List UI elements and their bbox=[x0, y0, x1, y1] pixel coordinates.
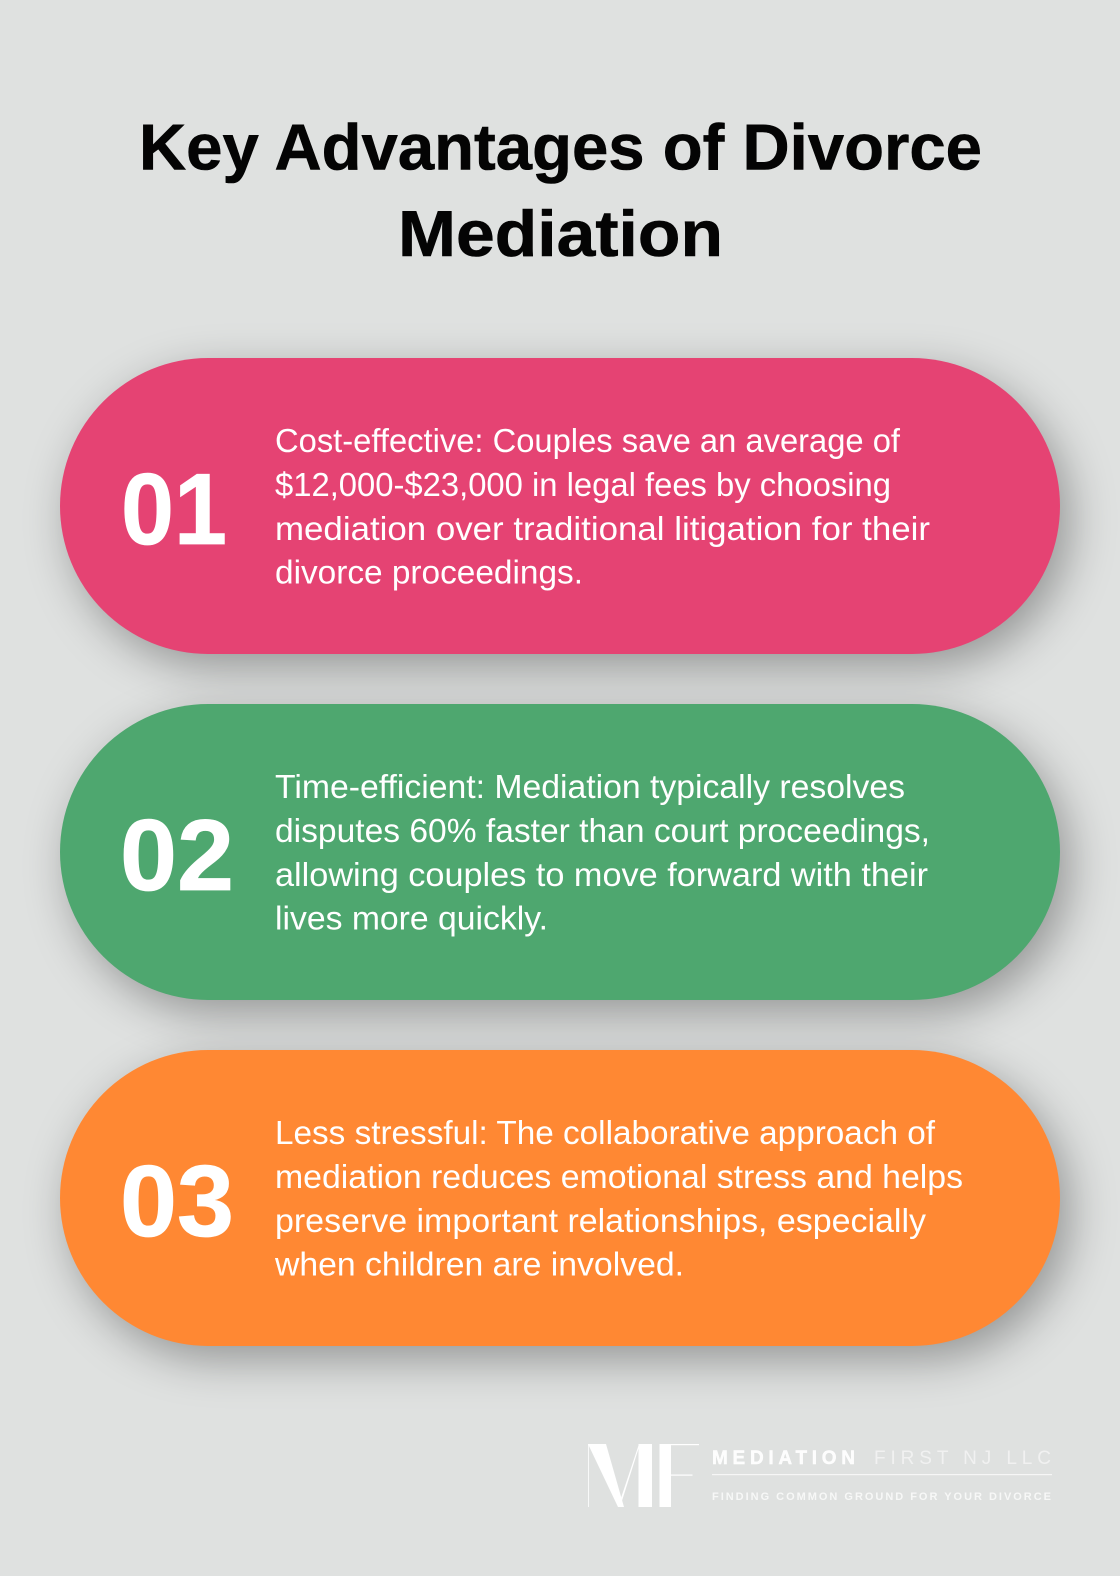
text block: less stressful bbox=[274, 1114, 963, 1282]
company name bbox=[712, 1448, 1051, 1469]
text block: cost-effective: divorce proceedings. bbox=[275, 554, 583, 590]
icon: MF monogram bbox=[588, 1444, 699, 1507]
number 01: 01 bbox=[121, 454, 227, 566]
pill background: green bbox=[60, 704, 1060, 1000]
title: Mediation bbox=[398, 197, 723, 270]
text block: cost-effective: mediation over traditional litigation for their bbox=[275, 510, 930, 547]
number 02: 02 bbox=[120, 800, 234, 912]
text block: time-efficient: Time-efficient: Mediation typically resolves bbox=[275, 768, 905, 805]
company name: MEDIATION bbox=[712, 1448, 855, 1469]
text block: time-efficient: allowing couples to move forward with their bbox=[275, 856, 928, 893]
tagline: FINDING COMMON GROUND FOR YOUR DIVORCE bbox=[712, 1491, 1051, 1503]
number 03: 03 bbox=[120, 1146, 234, 1258]
title: Key Advantages of Divorce bbox=[139, 110, 982, 184]
text block: time-efficient: disputes 60% faster than court proceedings, bbox=[275, 812, 930, 849]
pill background: orange bbox=[60, 1050, 1060, 1346]
company name: FIRST NJ LLC bbox=[874, 1448, 1051, 1469]
logo: Mediation First NJ LLC bbox=[588, 1444, 1052, 1507]
text block: time-efficient bbox=[275, 768, 930, 936]
text block: less stressful: Less stressful: The collaborative approach of bbox=[275, 1114, 936, 1151]
panel: cost-effective bbox=[60, 358, 1060, 654]
text block: cost-effective bbox=[275, 422, 930, 590]
pill background: pink bbox=[60, 358, 1060, 654]
text block: time-efficient: lives more quickly. bbox=[275, 900, 548, 936]
title bbox=[139, 110, 982, 270]
panel: less stressful bbox=[60, 1050, 1060, 1346]
text block: less stressful: mediation reduces emotional stress and helps bbox=[275, 1158, 963, 1195]
text block: less stressful: when children are involved. bbox=[274, 1246, 684, 1282]
text block: cost-effective: $12,000-$23,000 in legal fees by choosing bbox=[275, 466, 891, 503]
text block: cost-effective: Cost-effective: Couples save an average of bbox=[275, 422, 901, 459]
panel: time-efficient bbox=[60, 704, 1060, 1000]
text block: less stressful: preserve important relationships, especially bbox=[275, 1202, 927, 1239]
